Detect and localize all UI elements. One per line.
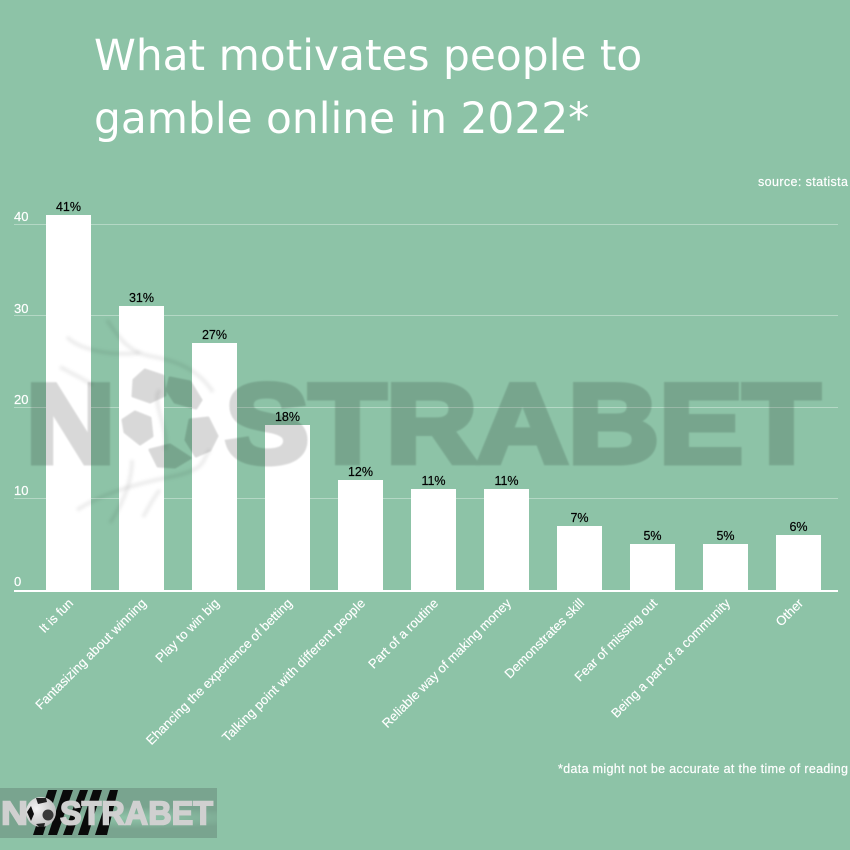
category labels: Fear of missing out xyxy=(571,595,660,684)
category labels: Play to win big xyxy=(152,596,222,665)
value labels: 27% xyxy=(202,328,227,342)
logo stripes xyxy=(33,790,118,835)
watermark net strokes xyxy=(60,320,213,523)
watermark wordmark: N xyxy=(26,362,115,486)
category labels: Ehancing the experience of betting xyxy=(143,596,295,748)
category labels: Part of a routine xyxy=(365,596,441,672)
watermark football patches xyxy=(123,370,217,467)
bar chart xyxy=(14,200,838,748)
category labels: Being a part of a community xyxy=(608,595,733,721)
gridlines and baseline xyxy=(14,224,838,591)
bars xyxy=(46,215,821,590)
category labels: Talking point with different people xyxy=(219,596,368,745)
y axis labels: 40 xyxy=(14,209,28,224)
value labels xyxy=(56,200,808,543)
value labels: 11% xyxy=(421,474,446,488)
value labels: 31% xyxy=(129,291,154,305)
category labels: Demonstrates skill xyxy=(501,595,587,681)
title: gamble online in 2022* xyxy=(94,94,589,143)
watermark xyxy=(26,362,820,486)
value labels: 5% xyxy=(643,529,662,543)
category labels: It is fun xyxy=(36,596,76,636)
watermark wordmark xyxy=(26,362,820,486)
watermark wordmark: STRABET xyxy=(225,362,820,486)
category labels: Fantasizing about winning xyxy=(32,596,149,712)
y axis labels xyxy=(14,209,28,589)
logo xyxy=(0,788,217,838)
logo football xyxy=(26,797,56,827)
logo background xyxy=(0,788,217,838)
title: What motivates people to xyxy=(94,31,642,80)
value labels: 12% xyxy=(348,465,373,479)
footnote: *data might not be accurate at the time of reading xyxy=(558,762,848,776)
y axis labels: 20 xyxy=(14,392,28,407)
y axis labels: 30 xyxy=(14,301,28,316)
value labels: 18% xyxy=(275,410,300,424)
category labels xyxy=(32,595,807,748)
value labels: 5% xyxy=(716,529,735,543)
value labels: 11% xyxy=(494,474,519,488)
value labels: 6% xyxy=(789,520,808,534)
category labels: Reliable way of making money xyxy=(379,595,514,731)
value labels: 41% xyxy=(56,200,81,214)
logo wordmark: STRABET xyxy=(60,794,213,832)
y axis labels: 0 xyxy=(14,574,21,589)
y axis labels: 10 xyxy=(14,483,28,498)
category labels: Other xyxy=(773,595,807,629)
value labels: 7% xyxy=(570,511,589,525)
source note: source: statista xyxy=(758,175,848,189)
title xyxy=(94,31,642,143)
logo wordmark: N xyxy=(1,794,28,832)
